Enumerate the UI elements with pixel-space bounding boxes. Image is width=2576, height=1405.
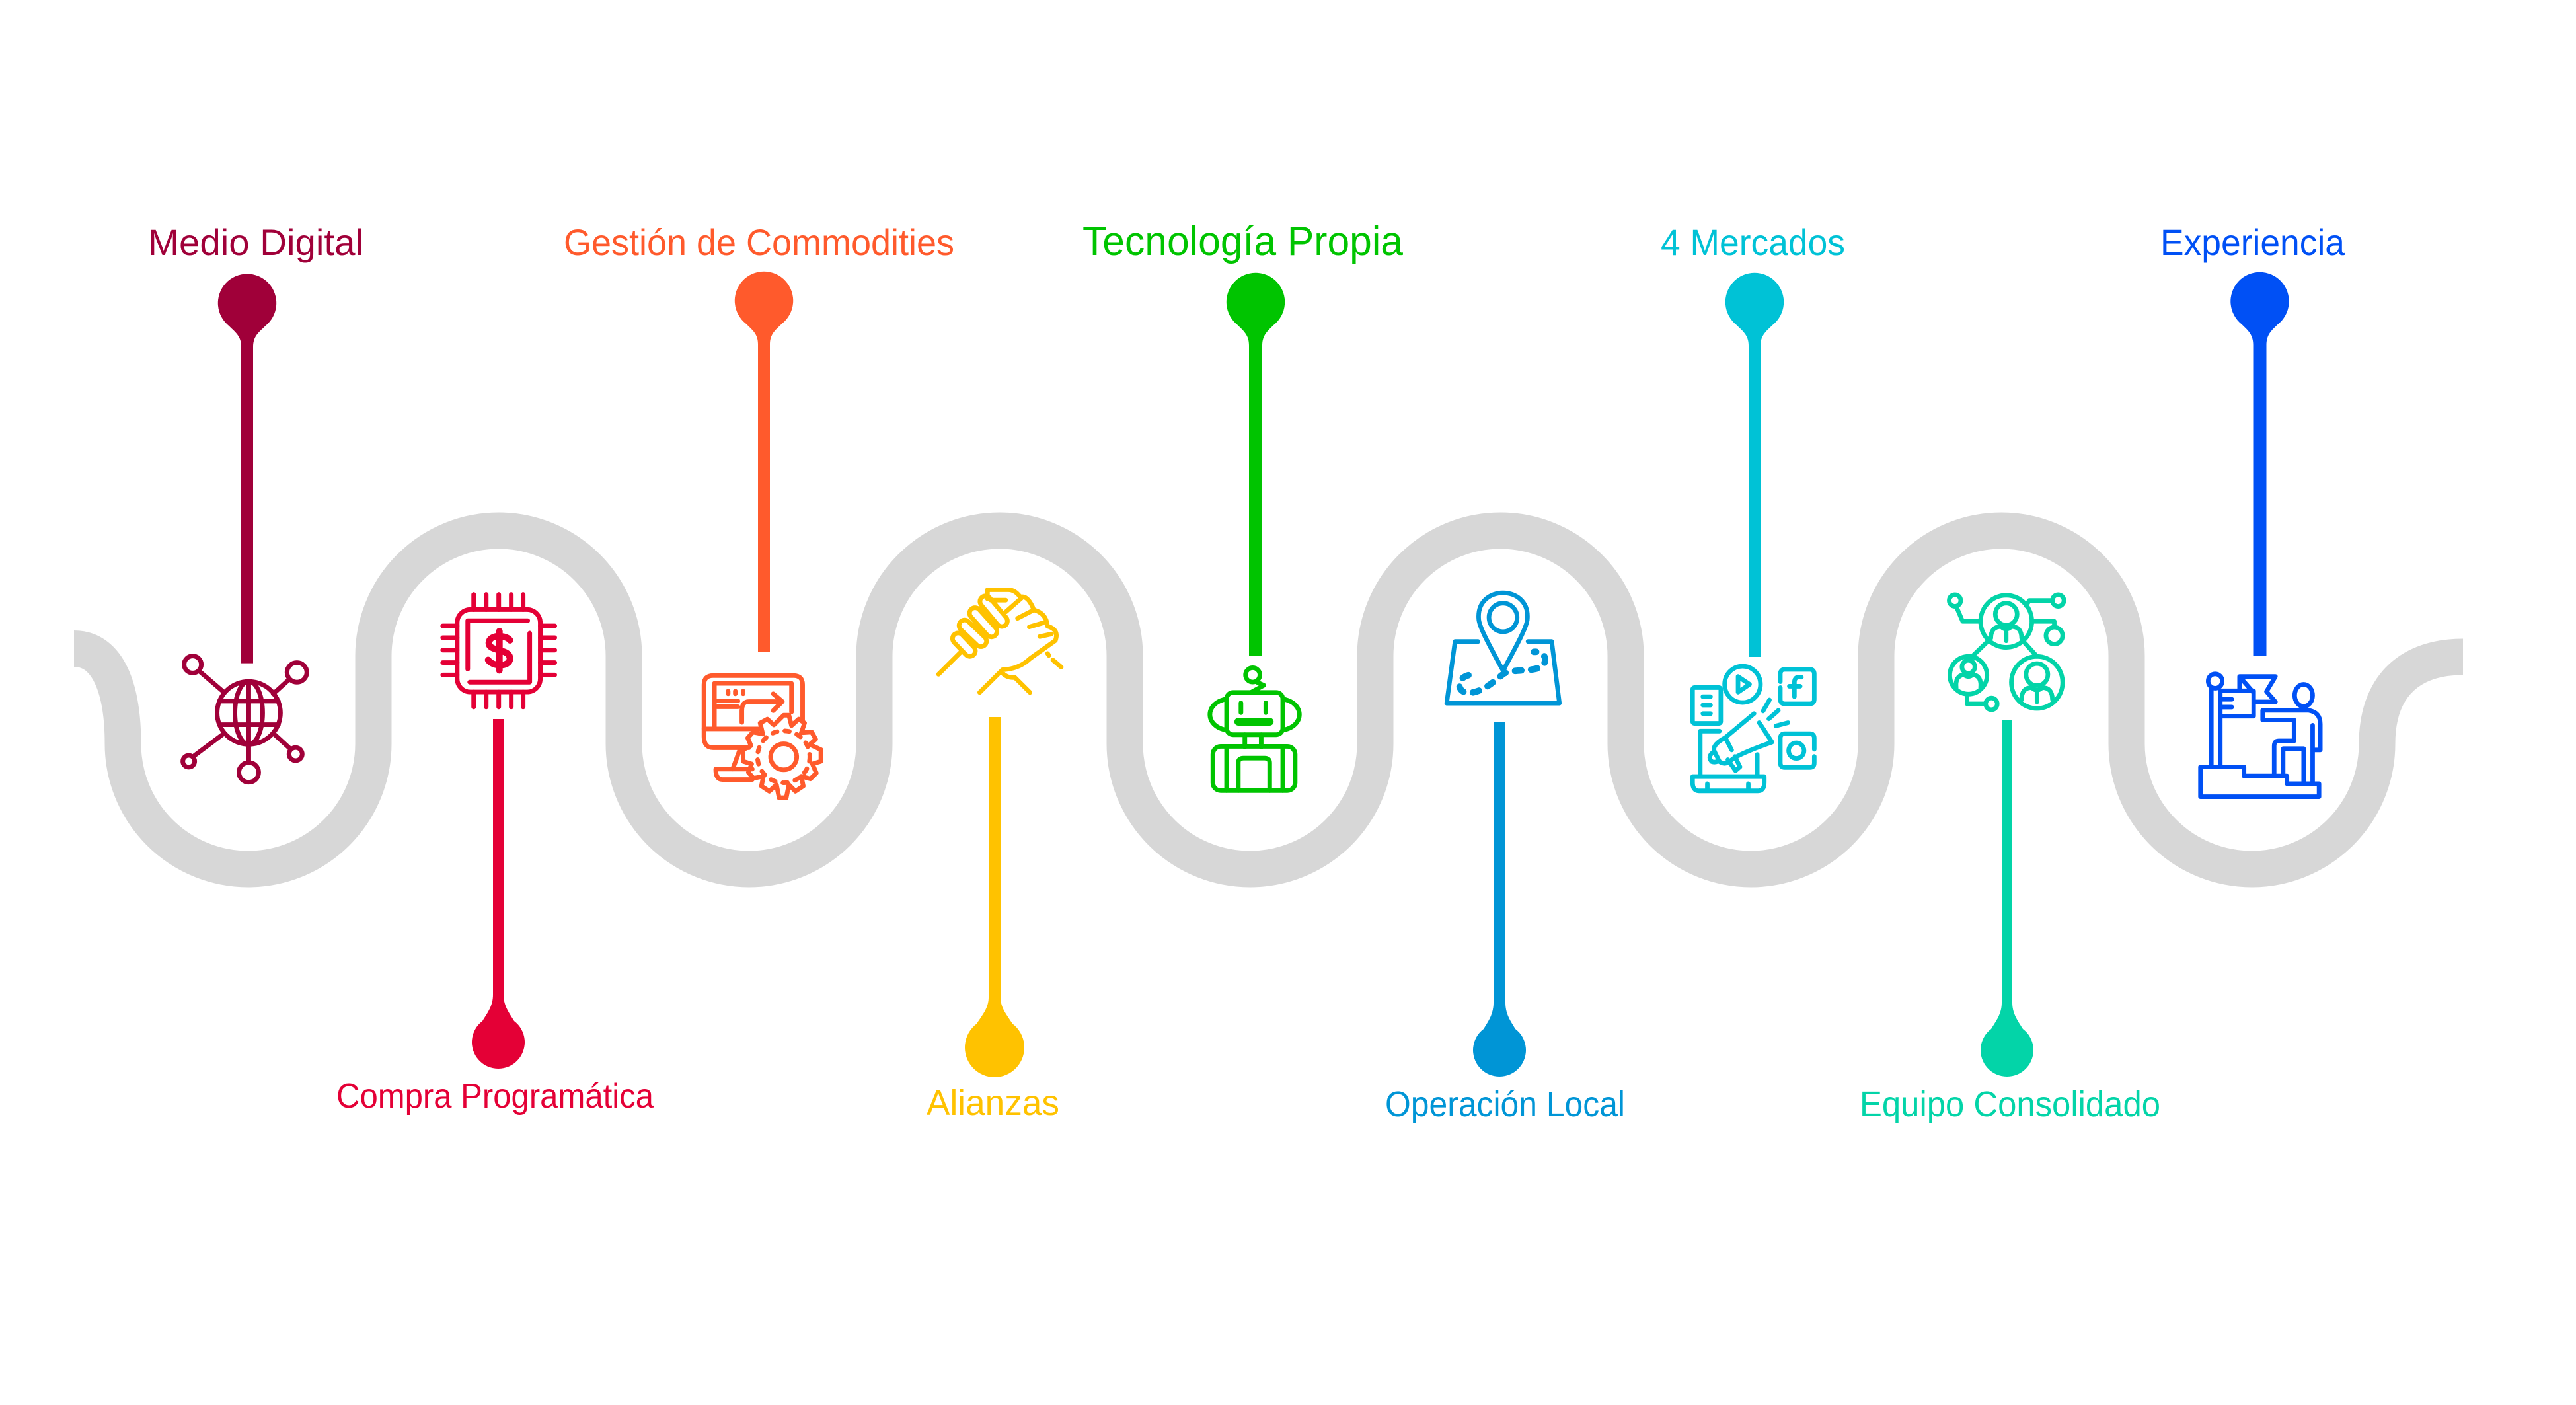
label: Experiencia: Experiencia: [2160, 221, 2345, 263]
pin: Medio Digital: [218, 274, 276, 664]
step: Medio Digital: [148, 221, 363, 782]
label: Alianzas: Alianzas: [927, 1083, 1059, 1123]
icon: monitor with gear: [704, 675, 821, 798]
pin: Tecnología Propia: [1227, 273, 1285, 656]
icon: globe network: [183, 656, 307, 782]
step: Operación Local: [1385, 593, 1625, 1124]
icon: social media megaphone: [1692, 666, 1814, 791]
label: Gestión de Commodities: Gestión de Commodities: [564, 221, 954, 263]
pin: 4 Mercados: [1725, 273, 1784, 657]
label: Tecnología Propia: Tecnología Propia: [1082, 219, 1403, 264]
step: Tecnología Propia: [1082, 219, 1403, 790]
label: Compra Programática: Compra Programática: [336, 1077, 654, 1116]
step: 4 Mercados: [1661, 221, 1845, 791]
label: Equipo Consolidado: Equipo Consolidado: [1860, 1084, 2160, 1124]
pin: Gestión de Commodities: [735, 272, 793, 652]
pin: Equipo Consolidado: [1981, 720, 2033, 1077]
icon: dollar chip: [443, 595, 555, 707]
icon: team network: [1949, 595, 2064, 710]
pin: Experiencia: [2230, 272, 2289, 656]
icon: handshake: [938, 589, 1061, 693]
grey winding road: [74, 531, 2463, 869]
icon: person with flag on podium: [2201, 674, 2320, 797]
icon: robot: [1210, 667, 1299, 790]
step: Gestión de Commodities: [564, 221, 954, 798]
label: Medio Digital: Medio Digital: [148, 221, 363, 263]
pin: Compra Programática: [472, 719, 525, 1069]
label: Operación Local: Operación Local: [1385, 1084, 1625, 1124]
step: Equipo Consolidado: [1860, 595, 2160, 1124]
label: 4 Mercados: 4 Mercados: [1661, 221, 1845, 263]
step: Experiencia: [2160, 221, 2345, 797]
step: Compra Programática: [336, 595, 654, 1116]
pin: Operación Local: [1473, 722, 1526, 1077]
pin: Alianzas: [965, 717, 1024, 1077]
step: Alianzas: [927, 589, 1061, 1123]
icon: map pin: [1447, 593, 1560, 703]
